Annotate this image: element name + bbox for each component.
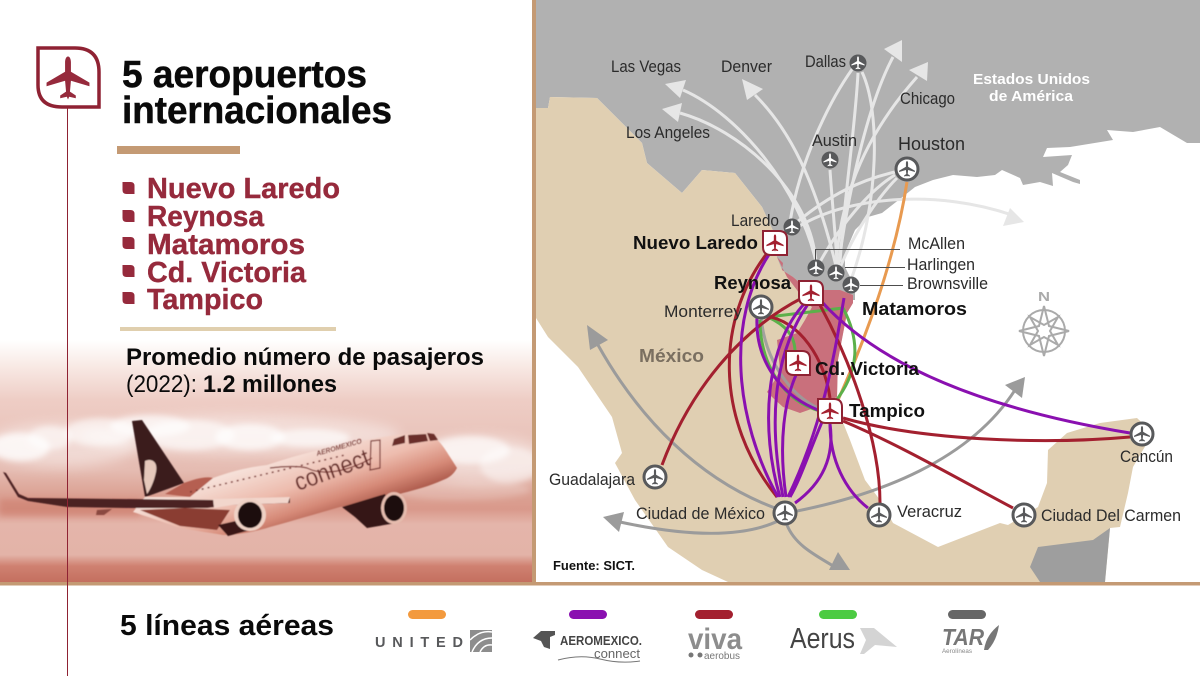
list rule xyxy=(120,327,336,331)
legend: Aeromexico Connect: connect xyxy=(594,646,640,661)
airport list: Reynosa xyxy=(147,201,265,233)
title rule xyxy=(117,146,240,154)
panel: photo of aircraft xyxy=(0,340,550,582)
map labels: Austin xyxy=(812,131,857,150)
McAllen, Harlingen, Brownsville leaders xyxy=(816,250,905,286)
legend: United: UNITED xyxy=(375,635,463,651)
map labels: Denver xyxy=(721,57,772,76)
passengers text: 1.2 millones xyxy=(203,371,337,398)
map: Tamaulipas xyxy=(767,257,853,413)
legend: Aerus xyxy=(790,610,897,655)
map labels: Dallas xyxy=(805,52,846,71)
map labels: Las Vegas xyxy=(611,57,681,76)
vertical rule xyxy=(67,108,68,676)
legend heading: 5 líneas aéreas xyxy=(120,610,334,642)
map labels: Ciudad Del Carmen xyxy=(1041,506,1181,525)
routes: outgoing gray xyxy=(587,317,1025,570)
legend: Viva Aerobus: viva xyxy=(688,623,742,656)
legend: Aerus: Aerus xyxy=(790,623,855,655)
passengers text xyxy=(126,344,484,398)
map: Guatemala xyxy=(1030,528,1110,582)
map labels: Cancún xyxy=(1120,447,1173,466)
title: 5 aeropuertos xyxy=(122,54,367,96)
title: internacionales xyxy=(122,90,392,132)
routes: light gray US xyxy=(662,40,1024,280)
legend: Aeromexico Connect xyxy=(533,610,642,662)
map labels: Laredo xyxy=(731,211,779,230)
compass xyxy=(1019,289,1069,356)
routes: Aeromexico Connect xyxy=(741,253,1130,508)
map labels: Chicago xyxy=(900,89,955,108)
passengers text: Promedio número de pasajeros xyxy=(126,344,484,371)
title xyxy=(122,54,392,132)
map labels: Los Angeles xyxy=(626,123,710,142)
map labels: Brownsville xyxy=(907,274,988,293)
legend: TAR: Aerolíneas xyxy=(942,648,973,655)
icon: aircraft: connect xyxy=(290,444,373,497)
source note: Fuente: SICT. xyxy=(553,559,635,573)
route: United xyxy=(838,182,907,400)
airport list: Matamoros xyxy=(147,229,305,261)
map labels: Nuevo Laredo xyxy=(633,233,758,253)
map labels: Guadalajara xyxy=(549,470,636,489)
passengers text: (2022): xyxy=(126,371,197,398)
airport list xyxy=(122,173,340,316)
icon: aircraft: AEROMEXICO xyxy=(315,438,363,458)
map labels: Houston xyxy=(898,134,965,154)
legend: Viva Aerobus xyxy=(688,610,742,662)
legend: Aeromexico Connect: AEROMEXICO. xyxy=(560,633,642,648)
map labels: Matamoros xyxy=(862,299,967,319)
clouds xyxy=(0,415,550,500)
map labels xyxy=(549,52,1181,525)
map labels: México xyxy=(639,346,704,366)
map labels: Cd. Victoria xyxy=(815,359,920,379)
panel: map xyxy=(536,0,1200,582)
icons: white-circle airports xyxy=(644,158,1153,526)
icon: airplane badge xyxy=(38,48,99,107)
icon: aircraft xyxy=(3,420,457,536)
map labels: Harlingen xyxy=(907,255,975,274)
map labels: Tampico xyxy=(849,401,925,421)
map labels: Monterrey xyxy=(664,302,743,321)
compass: N xyxy=(1038,289,1050,304)
map: United States xyxy=(536,0,1200,300)
map labels: McAllen xyxy=(908,234,965,253)
legend: TAR: TAR xyxy=(942,624,984,650)
icons: main airports xyxy=(763,231,842,423)
routes: Aerus xyxy=(760,308,855,411)
legend: Viva Aerobus: aerobus xyxy=(704,651,740,662)
airport list: Nuevo Laredo xyxy=(147,173,340,205)
map labels: Veracruz xyxy=(897,502,962,521)
legend: TAR xyxy=(942,610,999,655)
airport list: Cd. Victoria xyxy=(147,257,307,289)
legend: United xyxy=(375,610,492,652)
map labels: Reynosa xyxy=(714,273,792,293)
airport list: Tampico xyxy=(147,284,263,316)
icons: gray US airports xyxy=(784,54,866,294)
map labels: Estados Unidos xyxy=(973,71,1090,88)
map: Mexico xyxy=(536,97,1153,582)
map labels: Ciudad de México xyxy=(636,504,765,523)
routes: Viva Aerobus xyxy=(662,252,1130,508)
map labels: de América xyxy=(989,88,1074,105)
